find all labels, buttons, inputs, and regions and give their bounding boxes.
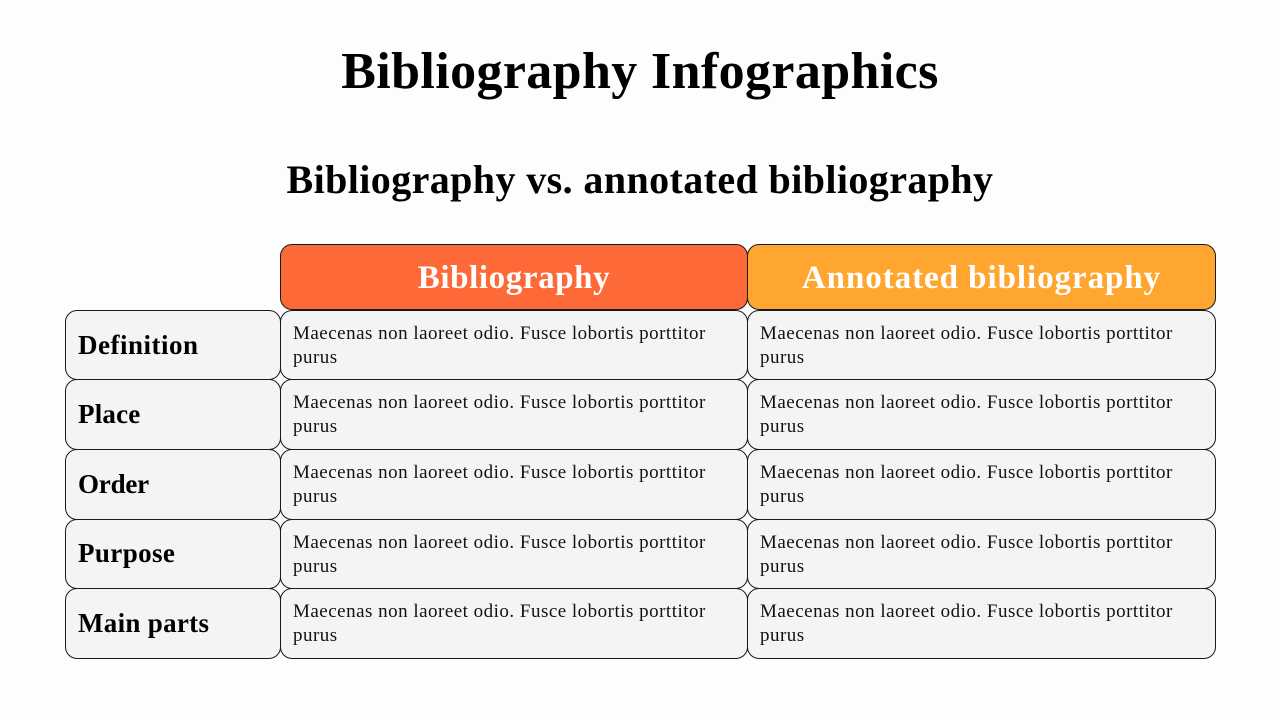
row label: Place bbox=[65, 379, 281, 450]
cell: Place, Bibliography: Maecenas non laoreet odio. Fusce lobortis porttitor bbox=[293, 392, 706, 413]
cell: Order, Bibliography: Maecenas non laoreet odio. Fusce lobortis porttitor bbox=[293, 462, 706, 483]
cell: Place, Annotated: Maecenas non laoreet odio. Fusce lobortis porttitor bbox=[760, 392, 1173, 413]
row label: Main parts: Main parts bbox=[78, 608, 209, 638]
cell: Main parts, Annotated: Maecenas non laoreet odio. Fusce lobortis porttitor bbox=[760, 601, 1173, 622]
row label: Purpose: Purpose bbox=[78, 538, 175, 568]
cell: Definition, Annotated: Maecenas non laoreet odio. Fusce lobortis porttitor bbox=[760, 323, 1173, 344]
cell: Main parts, Bibliography: Maecenas non laoreet odio. Fusce lobortis porttitor bbox=[293, 601, 706, 622]
cell: Purpose, Bibliography: Maecenas non laoreet odio. Fusce lobortis porttitor bbox=[293, 532, 706, 553]
comparison table bbox=[65, 244, 1216, 659]
cell: Definition, Bibliography: purus bbox=[293, 347, 338, 368]
cell: Purpose, Annotated: purus bbox=[760, 556, 805, 577]
cell: Main parts, Bibliography: purus bbox=[293, 625, 338, 646]
cell: Main parts, Bibliography bbox=[280, 588, 748, 659]
cell: Purpose, Bibliography: purus bbox=[293, 556, 338, 577]
cell: Place, Bibliography: purus bbox=[293, 416, 338, 437]
cell: Main parts, Annotated bbox=[747, 588, 1216, 659]
cell: Order, Bibliography: purus bbox=[293, 486, 338, 507]
cell: Purpose, Annotated: Maecenas non laoreet odio. Fusce lobortis porttitor bbox=[760, 532, 1173, 553]
column header: Bibliography bbox=[280, 244, 748, 310]
cell: Purpose, Bibliography bbox=[280, 519, 748, 589]
cell: Place, Annotated bbox=[747, 379, 1216, 450]
column header: Bibliography: Bibliography bbox=[418, 260, 610, 296]
cell: Order, Bibliography bbox=[280, 449, 748, 520]
subtitle: Bibliography vs. annotated bibliography bbox=[287, 157, 993, 202]
row label: Order bbox=[65, 449, 281, 520]
cell: Definition, Annotated bbox=[747, 310, 1216, 380]
column header: Annotated bibliography bbox=[747, 244, 1216, 310]
cell: Place, Annotated: purus bbox=[760, 416, 805, 437]
cell: Definition, Bibliography: Maecenas non laoreet odio. Fusce lobortis porttitor bbox=[293, 323, 706, 344]
row label: Definition: Definition bbox=[78, 330, 199, 360]
row label: Place: Place bbox=[78, 399, 140, 429]
cell: Purpose, Annotated bbox=[747, 519, 1216, 589]
title: Bibliography Infographics bbox=[341, 43, 939, 100]
row label: Main parts bbox=[65, 588, 281, 659]
column header: Annotated bibliography: Annotated bibliography bbox=[802, 260, 1161, 296]
cell: Main parts, Annotated: purus bbox=[760, 625, 805, 646]
cell: Definition, Bibliography bbox=[280, 310, 748, 380]
cell: Definition, Annotated: purus bbox=[760, 347, 805, 368]
row label: Definition bbox=[65, 310, 281, 380]
cell: Place, Bibliography bbox=[280, 379, 748, 450]
cell: Order, Annotated bbox=[747, 449, 1216, 520]
row label: Purpose bbox=[65, 519, 281, 589]
row label: Order: Order bbox=[78, 469, 149, 499]
cell: Order, Annotated: Maecenas non laoreet odio. Fusce lobortis porttitor bbox=[760, 462, 1173, 483]
cell: Order, Annotated: purus bbox=[760, 486, 805, 507]
